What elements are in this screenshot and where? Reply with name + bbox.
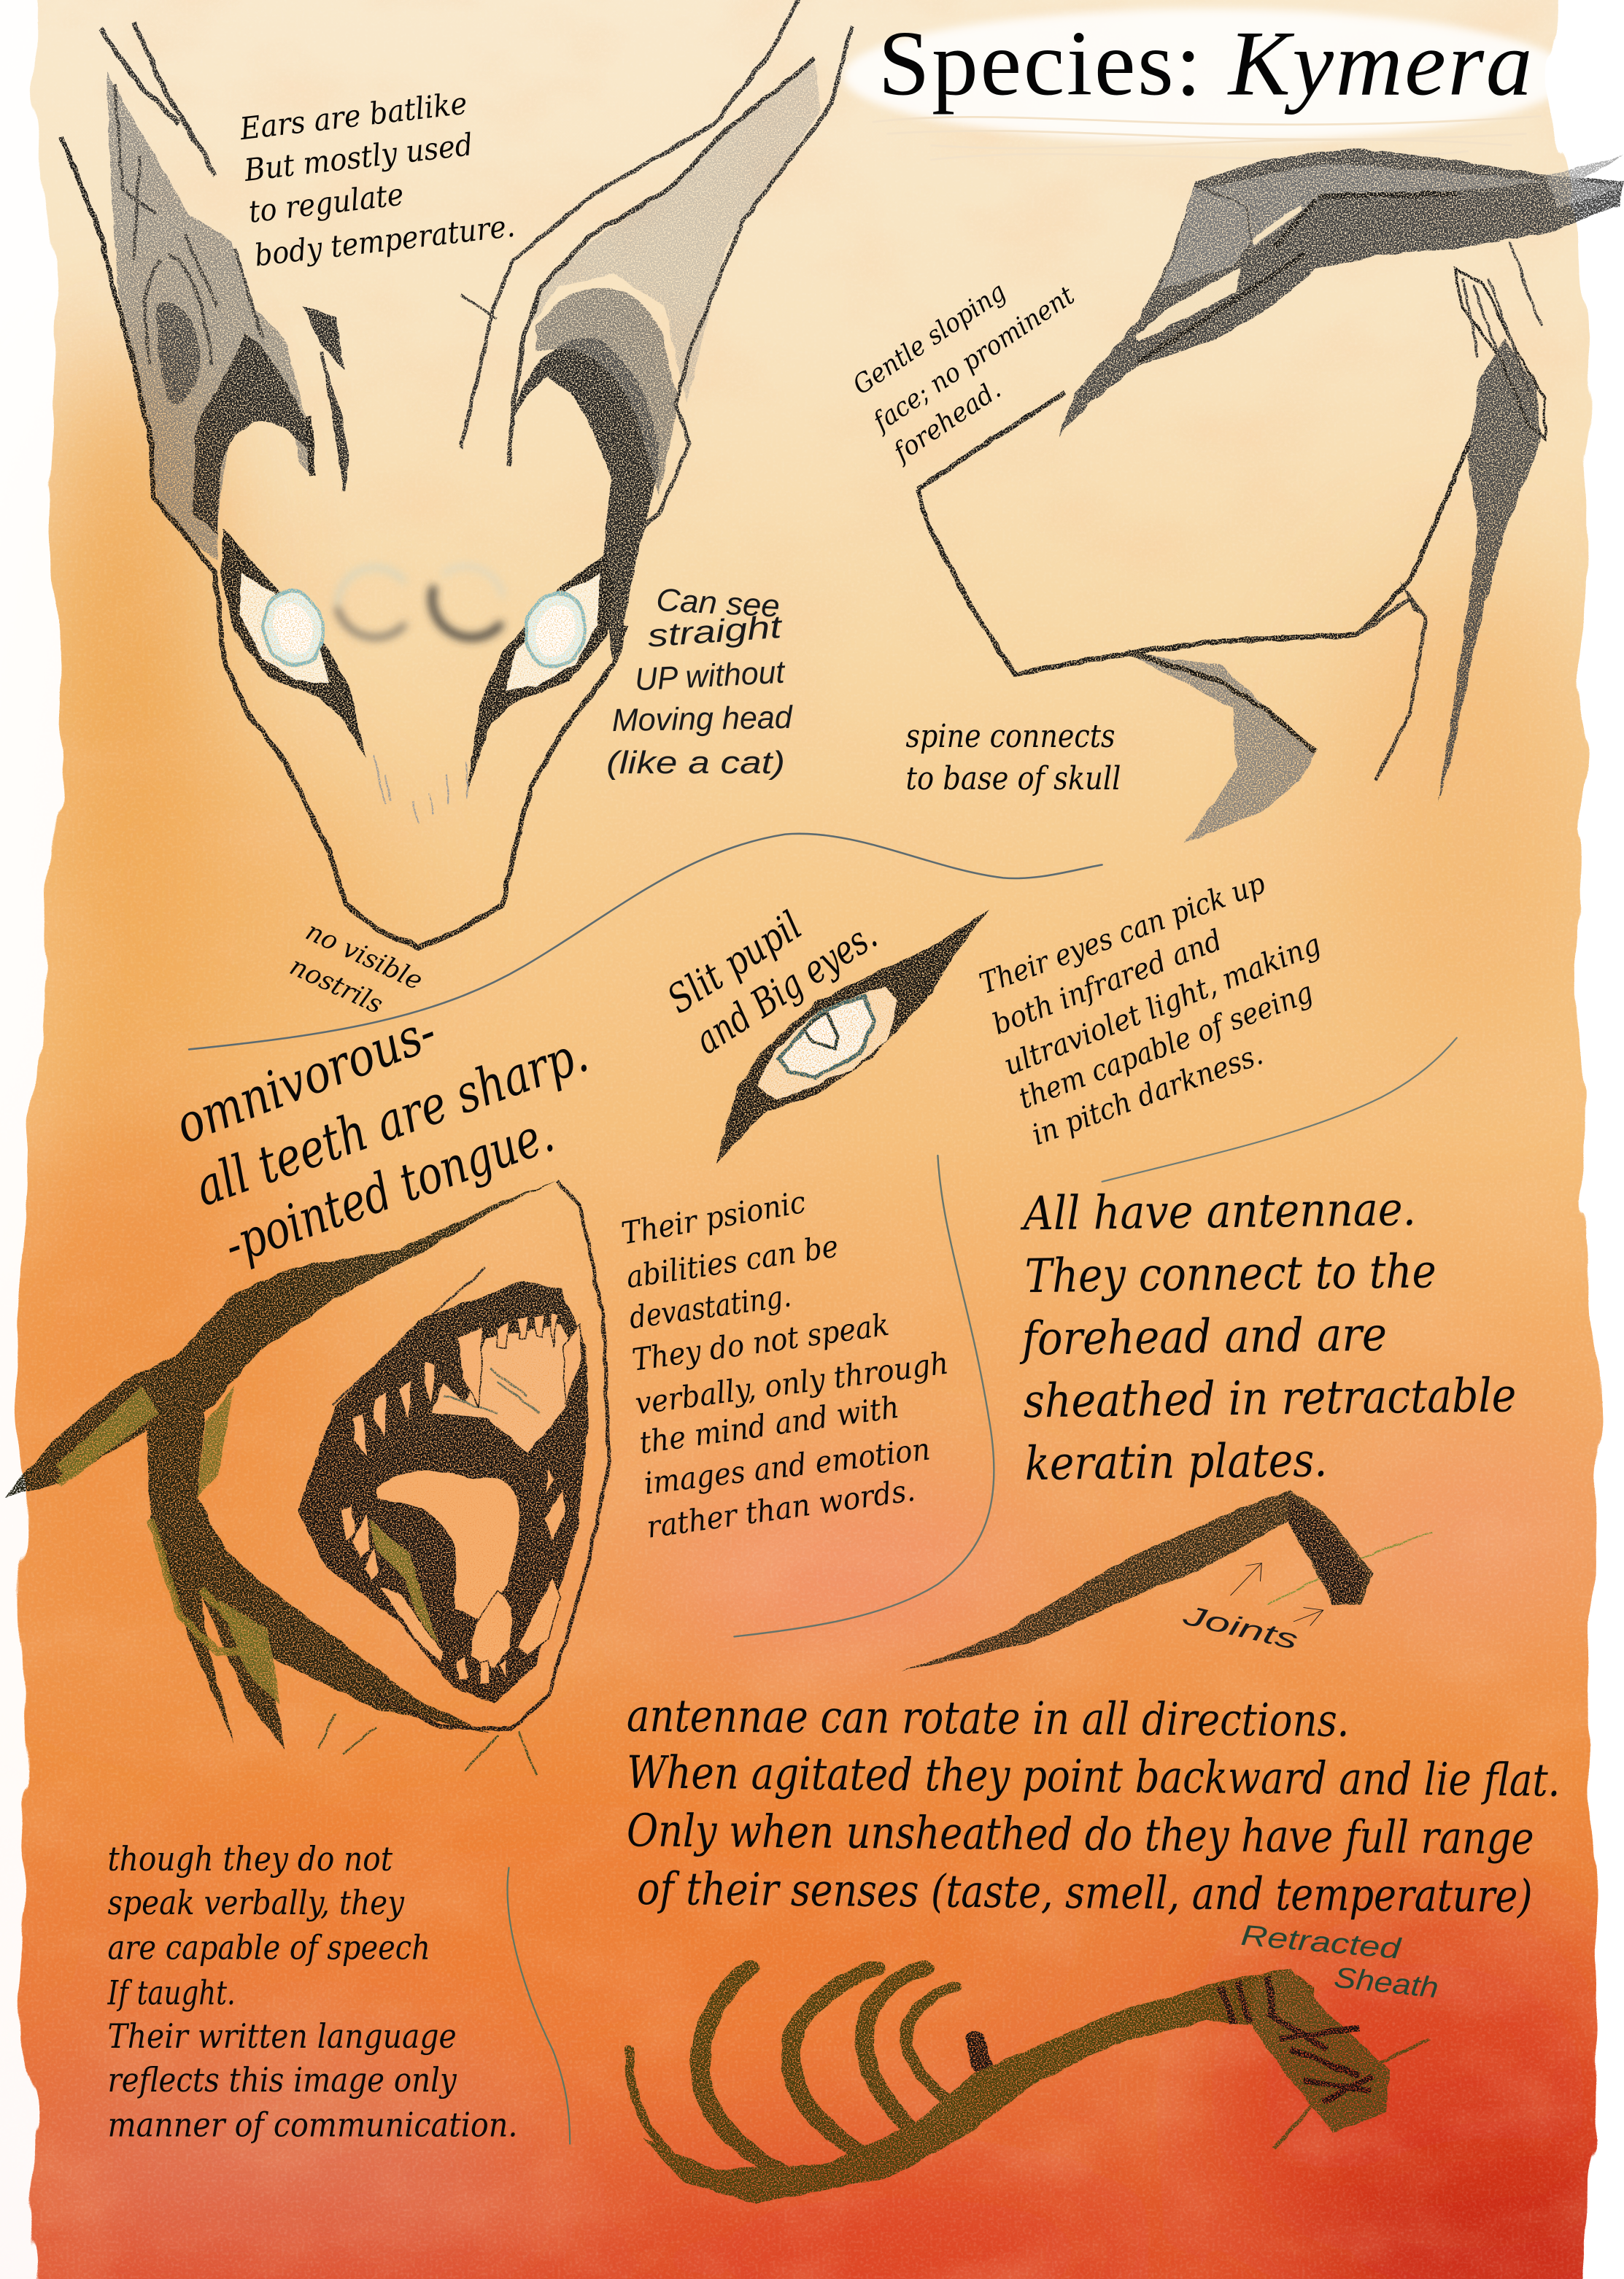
text: capable of speech: manner of communication. bbox=[107, 2105, 517, 2145]
jaw fan bbox=[1127, 653, 1316, 843]
label: retracted sheath: Retracted bbox=[1240, 1919, 1404, 1965]
text: capable of speech: Their written language bbox=[107, 2016, 457, 2056]
mouth cavity bbox=[297, 1280, 588, 1704]
upper teeth bbox=[352, 1314, 582, 1460]
text: all have antennae: forehead and are bbox=[1019, 1308, 1387, 1366]
brow crescent marks bbox=[337, 567, 503, 638]
handwritten note: can see straight up: straight bbox=[646, 609, 784, 654]
text: psionic abilities bbox=[619, 1184, 951, 1545]
text: no visible nostrils bbox=[285, 916, 427, 1020]
text: omnivorous heading: -pointed tongue. bbox=[216, 1102, 561, 1276]
text: gentle sloping face note: Gentle sloping bbox=[848, 276, 1011, 401]
text: capable of speech bbox=[107, 1839, 517, 2145]
text: spine note bbox=[906, 718, 1121, 797]
text: gentle sloping face note: face; no prominent bbox=[866, 280, 1080, 438]
text: psionic abilities: verbally, only through bbox=[633, 1344, 951, 1421]
fur mass bbox=[4, 1181, 557, 1749]
label: retracted sheath: Sheath bbox=[1332, 1962, 1440, 2004]
text: omnivorous heading: omnivorous- bbox=[167, 1000, 444, 1156]
left ear shading bbox=[106, 71, 312, 560]
label: joints: Joints bbox=[1180, 1600, 1301, 1656]
drawing: open mouth with teeth bbox=[4, 1181, 609, 1776]
text: slit pupil: and Big eyes. bbox=[687, 912, 885, 1063]
text: omnivorous heading: all teeth are sharp. bbox=[187, 1022, 595, 1218]
left eye bbox=[220, 527, 366, 759]
jaw rim line bbox=[377, 1181, 609, 1729]
text: all have antennae: They connect to the bbox=[1024, 1245, 1437, 1304]
drawing: antenna with joints bbox=[902, 1490, 1433, 1672]
text: omnivorous heading bbox=[167, 1000, 595, 1276]
text: all have antennae: sheathed in retractable bbox=[1023, 1369, 1517, 1429]
text: slit pupil bbox=[659, 902, 885, 1063]
text: no visible nostrils: nostrils bbox=[285, 951, 387, 1020]
tongue bbox=[368, 1519, 444, 1656]
text: gentle sloping face note: forehead. bbox=[886, 374, 1006, 469]
handwritten note: can see straight up: Moving head bbox=[611, 700, 794, 738]
text: capable of speech: speak verbally, they bbox=[107, 1883, 405, 1922]
stalk bbox=[643, 1968, 1313, 2204]
jaw outline bbox=[918, 436, 1473, 674]
sheath bbox=[1253, 1968, 1390, 2133]
text: infrared note: ultraviolet light, making bbox=[999, 927, 1326, 1083]
text: psionic abilities: Their psionic bbox=[619, 1184, 808, 1251]
text: spine note: spine connects bbox=[906, 718, 1115, 755]
text: spine note: to base of skull bbox=[906, 760, 1121, 797]
text: psionic abilities: devastating. bbox=[627, 1277, 793, 1336]
label: retracted sheath bbox=[1240, 1919, 1440, 2004]
title: Species: Kymera bbox=[878, 12, 1532, 115]
arrows: joints bbox=[1231, 1563, 1323, 1626]
fronds bbox=[630, 1968, 982, 2191]
lower teeth bbox=[341, 1466, 565, 1685]
text: psionic abilities: They do not speak bbox=[630, 1307, 892, 1378]
brow and crest mass bbox=[1058, 148, 1624, 436]
drawing: retracted sheath antenna bbox=[630, 1968, 1429, 2204]
text: psionic abilities: images and emotion bbox=[642, 1431, 932, 1501]
text: ears note: Ears are batlike bbox=[237, 85, 469, 147]
title backing wash bbox=[843, 9, 1570, 160]
text: ears note: body temperature. bbox=[252, 208, 517, 274]
text: psionic abilities: abilities can be bbox=[624, 1228, 840, 1295]
drawing: kymera head side profile bbox=[918, 148, 1624, 843]
handwritten note: can see straight up bbox=[606, 582, 794, 781]
text: psionic abilities: the mind and with bbox=[637, 1389, 901, 1460]
handwritten note: can see straight up: (like a cat) bbox=[606, 745, 785, 781]
back fur and spine bbox=[1437, 338, 1541, 804]
text: ears note: to regulate bbox=[247, 177, 406, 230]
text: all have antennae bbox=[1019, 1183, 1517, 1491]
text: slit pupil: Slit pupil bbox=[659, 902, 810, 1023]
text: all have antennae: All have antennae. bbox=[1020, 1183, 1416, 1242]
text: antennae rotation bbox=[627, 1690, 1561, 1923]
drawing: kymera head front view bbox=[61, 0, 851, 948]
right ear shading bbox=[525, 58, 821, 403]
text: no visible nostrils: no visible bbox=[301, 916, 427, 997]
text: infrared note bbox=[975, 867, 1326, 1152]
text: antennae rotation: antennae can rotate in all directions. bbox=[627, 1690, 1350, 1747]
text: capable of speech: reflects this image only bbox=[107, 2060, 457, 2100]
right eye bbox=[466, 554, 614, 794]
text: infrared note: both infrared and bbox=[988, 924, 1226, 1042]
handwritten note: can see straight up: Can see bbox=[655, 582, 781, 624]
text: all have antennae: keratin plates. bbox=[1024, 1433, 1328, 1491]
text: infrared note: them capable of seeing bbox=[1014, 975, 1318, 1116]
text: capable of speech: though they do not bbox=[107, 1839, 393, 1878]
text: psionic abilities: rather than words. bbox=[644, 1472, 917, 1545]
text: infrared note: Their eyes can pick up bbox=[975, 867, 1269, 1001]
text: infrared note: in pitch darkness. bbox=[1028, 1037, 1267, 1152]
palate bbox=[431, 1325, 580, 1453]
text: capable of speech: If taught. bbox=[107, 1973, 236, 2012]
tongue space bbox=[377, 1471, 519, 1619]
drawing: slit pupil eye bbox=[716, 910, 989, 1163]
text: ears note bbox=[237, 85, 517, 274]
thin divider curves bbox=[189, 834, 1457, 2144]
text: capable of speech: are capable of speech bbox=[107, 1928, 430, 1967]
handwritten note: can see straight up: UP without bbox=[634, 654, 786, 697]
text: ears note: But mostly used bbox=[241, 126, 475, 188]
